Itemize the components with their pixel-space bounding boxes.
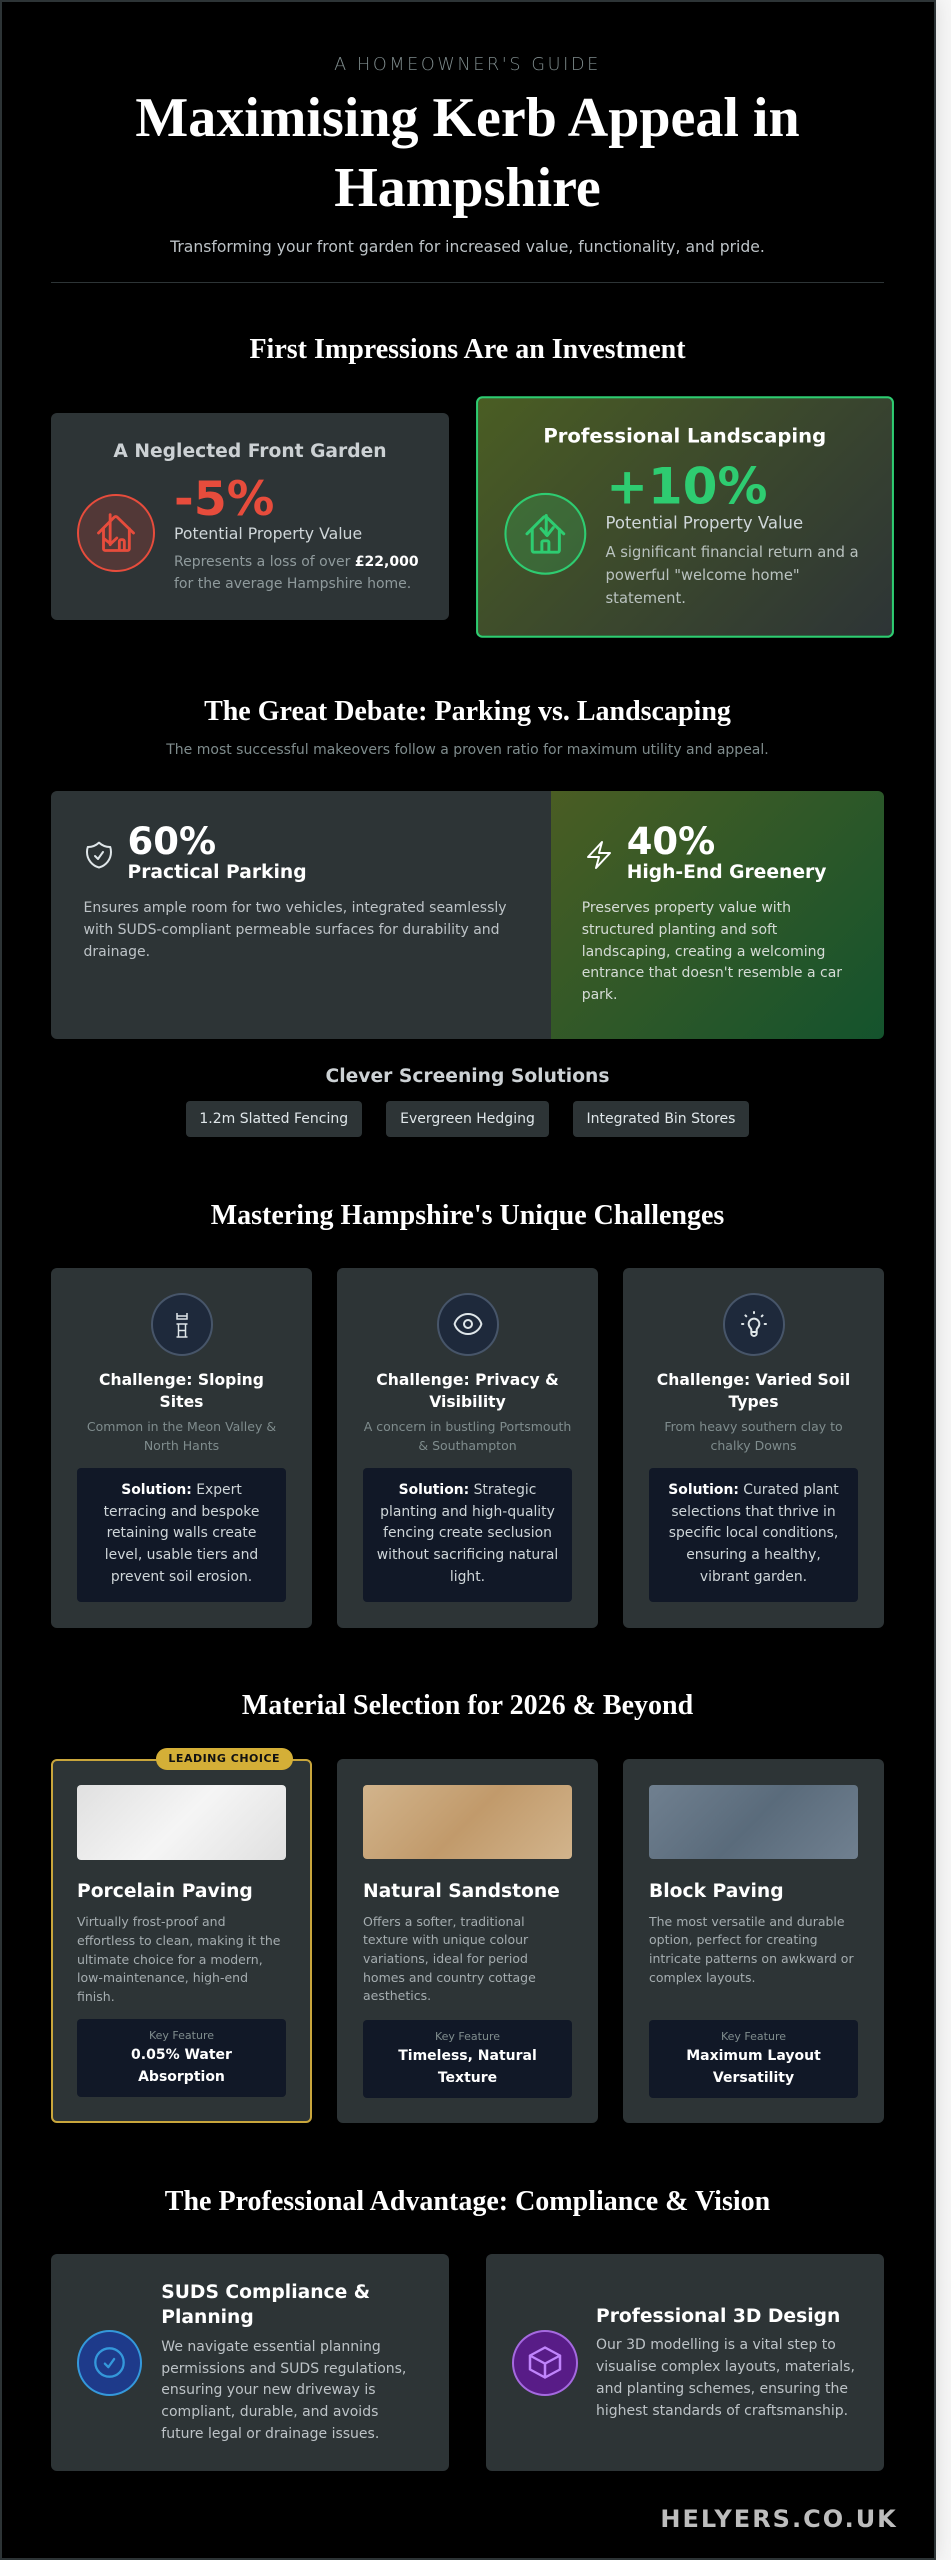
- suds text: compliant, durable, and avoids: [161, 2404, 378, 2420]
- stat 40%: 40%: [627, 820, 715, 863]
- greenery text: structured planting and soft: [582, 922, 777, 938]
- key feature: Key Feature: [435, 2030, 500, 2043]
- material description: low-maintenance, high-end: [77, 1970, 248, 1985]
- material description: Virtually frost-proof and: [77, 1914, 226, 1929]
- chip: fencing: [186, 1101, 362, 1137]
- challenge location: chalky Downs: [710, 1438, 797, 1453]
- stat -5%: -5%: [174, 472, 274, 527]
- challenge title: [99, 1370, 264, 1410]
- heading: screening: Clever Screening Solutions: [326, 1066, 609, 1087]
- title: [135, 86, 800, 218]
- key feature: [77, 2019, 286, 2097]
- solution box: level, usable tiers and: [105, 1547, 258, 1563]
- material description: texture with unique colour: [363, 1932, 528, 1947]
- heading: great debate: The Great Debate: Parking vs. Landscaping: [204, 696, 731, 726]
- suds title: Planning: [161, 2307, 254, 2328]
- solution box: [77, 1468, 286, 1602]
- material description: homes and country cottage: [363, 1970, 536, 1985]
- neglected heading: A Neglected Front Garden: [113, 440, 387, 462]
- key feature: Texture: [438, 2070, 497, 2086]
- subtitle: Transforming your front garden for increased value, functionality, and pride.: [170, 238, 765, 256]
- panel: neglected garden: [51, 413, 449, 620]
- icon: terraces: [150, 1293, 212, 1356]
- challenge location: [87, 1419, 276, 1453]
- greenery heading: High-End Greenery: [627, 862, 826, 883]
- icon: cube: [512, 2330, 578, 2396]
- material description: ultimate choice for a modern,: [77, 1952, 263, 1967]
- landscaping heading: Professional Landscaping: [543, 425, 826, 447]
- icon: eye: [436, 1293, 498, 1356]
- suds text: We navigate essential planning: [161, 2339, 381, 2355]
- material name: Natural Sandstone: [363, 1880, 560, 1902]
- solution box: without sacrificing natural: [377, 1547, 558, 1563]
- panel: sloping sites: [51, 1268, 312, 1628]
- panel: porcelain: [51, 1759, 312, 2123]
- solution box: specific local conditions,: [669, 1525, 838, 1541]
- stat label: Potential Property Value: [606, 512, 803, 532]
- solution box: vibrant garden.: [700, 1569, 807, 1585]
- solution box: prevent soil erosion.: [111, 1569, 252, 1585]
- solution box: [649, 1468, 858, 1602]
- panel: block paving: [623, 1759, 884, 2123]
- solution box: selections that thrive in: [671, 1504, 836, 1520]
- challenge location: North Hants: [144, 1438, 219, 1453]
- greenery text: [582, 900, 842, 1003]
- material description: intricate patterns on awkward or: [649, 1951, 854, 1966]
- solution box: Solution: Curated plant: [668, 1482, 839, 1498]
- challenge title: Challenge: Privacy &: [376, 1370, 559, 1388]
- icon: bolt: [587, 841, 611, 869]
- greenery text: park.: [582, 987, 617, 1003]
- icon: shield: [86, 842, 112, 868]
- challenge title: [376, 1370, 559, 1410]
- parking text: [84, 900, 507, 960]
- key feature: [363, 2020, 572, 2098]
- stat description: statement.: [606, 590, 686, 607]
- solution box: fencing create seclusion: [383, 1525, 552, 1541]
- stat description: [606, 544, 859, 607]
- material description: effortless to clean, making it the: [77, 1933, 280, 1948]
- key feature: Absorption: [138, 2068, 225, 2084]
- 3D design title: Professional 3D Design: [596, 2306, 840, 2327]
- panel: soil: [623, 1268, 884, 1628]
- material description: [77, 1914, 280, 2004]
- stat description: [174, 554, 419, 592]
- material name: Block Paving: [649, 1880, 784, 1902]
- solution box: retaining walls create: [107, 1525, 256, 1541]
- swatch: sandstone: [363, 1785, 572, 1859]
- greenery text: landscaping, creating a welcoming: [582, 944, 825, 960]
- 3D design text: visualise complex layouts, materials,: [596, 2359, 855, 2375]
- material name: Porcelain Paving: [77, 1881, 253, 1902]
- footer brand: HELYERS.CO.UK: [660, 2505, 898, 2533]
- heading: challenges: Mastering Hampshire's Unique Challenges: [211, 1200, 724, 1231]
- title: Maximising Kerb Appeal in: [135, 86, 800, 148]
- key feature: Maximum Layout: [686, 2048, 821, 2064]
- solution box: planting and high-quality: [380, 1504, 555, 1520]
- material description: variations, ideal for period: [363, 1951, 528, 1966]
- solution box: [363, 1468, 572, 1602]
- material description: complex layouts.: [649, 1970, 755, 1985]
- chip: bin stores: Integrated Bin Stores: [587, 1111, 735, 1127]
- icon: light bulb: [722, 1293, 784, 1356]
- 3D design text: highest standards of craftsmanship.: [596, 2403, 848, 2419]
- stat description: for the average Hampshire home.: [174, 576, 411, 592]
- icon: house with rising arrow: [504, 493, 586, 574]
- suds text: [161, 2339, 406, 2442]
- solution box: Solution: Expert: [121, 1482, 242, 1498]
- panel: 40 percent greenery: [551, 791, 884, 1039]
- key feature: Versatility: [713, 2070, 794, 2086]
- stat 60%: 60%: [128, 820, 216, 863]
- challenge title: Challenge: Sloping: [99, 1370, 264, 1388]
- swatch: porcelain: [77, 1785, 286, 1860]
- chip: fencing: 1.2m Slatted Fencing: [199, 1111, 348, 1127]
- greenery text: Preserves property value with: [582, 900, 791, 916]
- chip: bin stores: [573, 1101, 749, 1137]
- key feature: 0.05% Water: [131, 2046, 232, 2062]
- suds title: SUDS Compliance &: [161, 2282, 370, 2303]
- key feature: [649, 2020, 858, 2098]
- suds title: [161, 2282, 370, 2328]
- heading: advantage: The Professional Advantage: Compliance & Vision: [165, 2186, 770, 2216]
- material description: aesthetics.: [363, 1988, 431, 2003]
- badge: leading choice: LEADING CHOICE: [168, 1752, 280, 1765]
- chip: hedging: [386, 1101, 549, 1137]
- material description: finish.: [77, 1989, 115, 2004]
- material description: [363, 1914, 536, 2003]
- material description: The most versatile and durable: [649, 1914, 845, 1928]
- heading: first impressions: First Impressions Are an Investment: [249, 334, 686, 364]
- material description: Offers a softer, traditional: [363, 1914, 525, 1928]
- heading: materials: Material Selection for 2026 & Beyond: [242, 1690, 693, 1721]
- 3D design text: [596, 2337, 855, 2419]
- badge: leading choice: [156, 1748, 292, 1770]
- suds text: future legal or drainage issues.: [161, 2426, 379, 2442]
- panel: professional landscaping: [476, 396, 893, 637]
- chip: hedging: Evergreen Hedging: [400, 1111, 535, 1127]
- challenge title: Types: [728, 1392, 778, 1410]
- solution box: terracing and bespoke: [104, 1504, 259, 1520]
- stat description: A significant financial return and a: [606, 544, 859, 561]
- solution box: Solution: Strategic: [399, 1482, 536, 1498]
- challenge location: [664, 1419, 843, 1453]
- eyebrow: A HOMEOWNER'S GUIDE: [334, 54, 601, 74]
- stat description: powerful "welcome home": [606, 567, 800, 584]
- solution box: ensuring a healthy,: [686, 1547, 821, 1563]
- panel: 60 percent parking: [51, 791, 551, 1039]
- panel: split ratio bar: [51, 791, 884, 1039]
- panel: sandstone: [337, 1759, 598, 2123]
- solution box: light.: [450, 1569, 485, 1585]
- icon: house with falling arrow: [77, 494, 155, 572]
- stat label: Potential Property Value: [174, 524, 362, 543]
- key feature: Key Feature: [721, 2030, 786, 2043]
- debate intro: The most successful makeovers follow a proven ratio for maximum utility and appeal.: [166, 742, 769, 758]
- stat description: Represents a loss of over £22,000: [174, 554, 419, 570]
- challenge title: Challenge: Varied Soil: [657, 1370, 850, 1388]
- parking text: with SUDS-compliant permeable surfaces for durability and: [84, 922, 500, 938]
- greenery text: entrance that doesn't resemble a car: [582, 965, 842, 981]
- challenge location: From heavy southern clay to: [664, 1419, 843, 1434]
- panel: suds compliance: [51, 2254, 449, 2471]
- material description: option, perfect for creating: [649, 1932, 818, 1947]
- panel: privacy: [337, 1268, 598, 1628]
- challenge title: Sites: [160, 1392, 203, 1410]
- challenge title: [657, 1370, 850, 1410]
- challenge location: & Southampton: [418, 1438, 517, 1453]
- suds text: permissions and SUDS regulations,: [161, 2361, 406, 2377]
- challenge title: Visibility: [429, 1392, 506, 1410]
- key feature: Key Feature: [149, 2029, 214, 2042]
- 3D design text: and planting schemes, ensuring the: [596, 2381, 848, 2397]
- parking text: drainage.: [84, 944, 150, 960]
- challenge location: A concern in bustling Portsmouth: [364, 1419, 571, 1434]
- swatch: block: [649, 1785, 858, 1859]
- 3D design text: Our 3D modelling is a vital step to: [596, 2337, 836, 2353]
- stat +10%: +10%: [606, 458, 767, 516]
- parking text: Ensures ample room for two vehicles, integrated seamlessly: [84, 900, 507, 916]
- challenge location: [364, 1419, 571, 1453]
- parking heading: Practical Parking: [128, 862, 307, 883]
- suds text: ensuring your new driveway is: [161, 2382, 376, 2398]
- key feature: Timeless, Natural: [398, 2048, 537, 2064]
- icon: check badge: [77, 2330, 142, 2396]
- title: Hampshire: [334, 156, 601, 218]
- material description: [648, 1914, 854, 1985]
- panel: 3D design: [486, 2254, 884, 2471]
- challenge location: Common in the Meon Valley &: [87, 1419, 276, 1434]
